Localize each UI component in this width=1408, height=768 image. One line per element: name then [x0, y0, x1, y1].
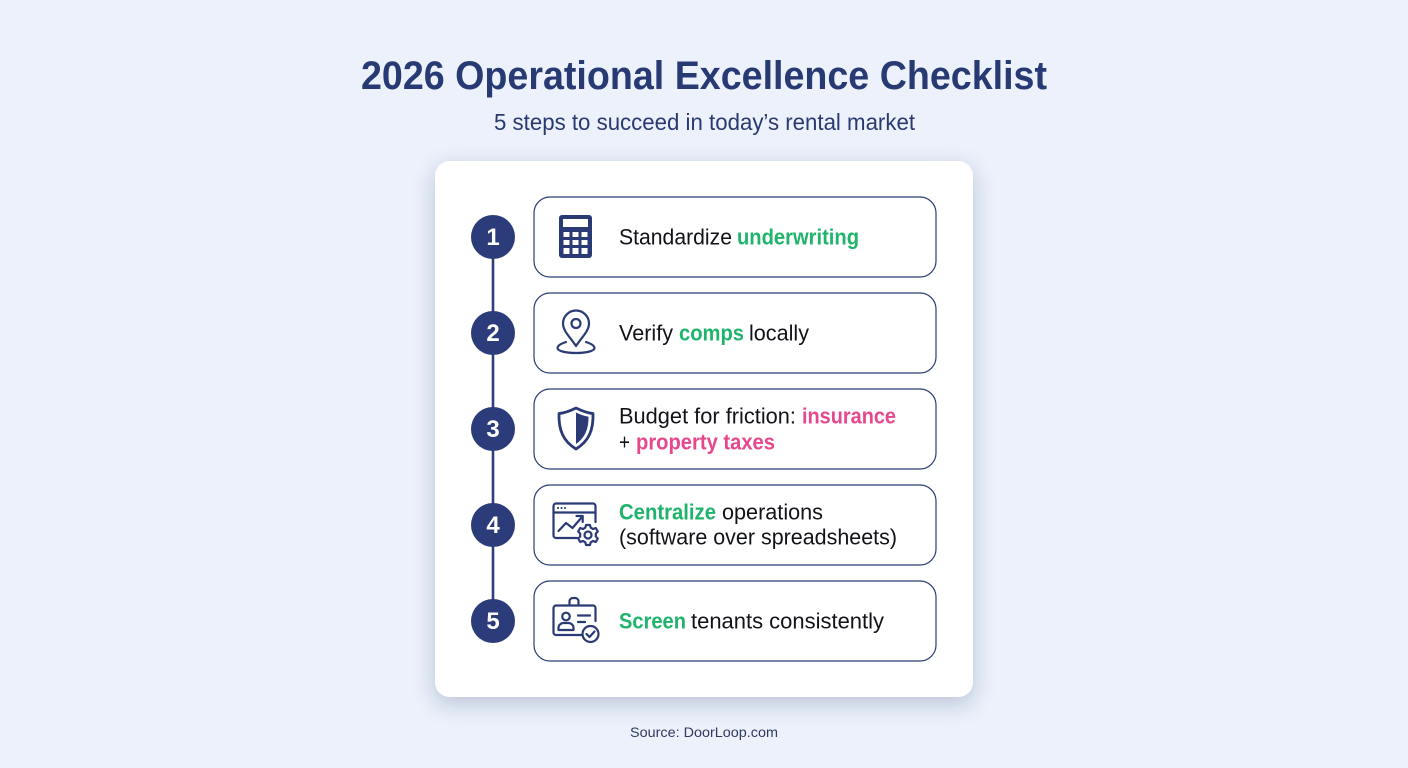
icon: calculator — [559, 215, 592, 258]
step 4 — [471, 485, 936, 565]
step 3: property taxes — [636, 430, 775, 454]
number badge 1: 1 — [486, 224, 500, 251]
number badge 5 — [471, 599, 515, 643]
text 1: underwriting — [737, 224, 859, 250]
source note: Source: DoorLoop.com — [630, 724, 778, 740]
text 3: Budget for friction: — [619, 404, 796, 428]
step 1 — [471, 197, 936, 277]
icon: ID badge with check — [554, 598, 598, 642]
card 3 — [534, 389, 936, 469]
icon: shield — [559, 408, 593, 449]
card 1 — [534, 197, 936, 277]
number badge 5: 5 — [486, 608, 500, 635]
card 5 — [534, 581, 936, 661]
step 3 — [471, 389, 936, 469]
text 5: Screen — [619, 608, 686, 634]
number badge 4: 4 — [486, 512, 500, 539]
step 5 — [471, 581, 936, 661]
number badge 2 — [471, 311, 515, 355]
text 1: Standardize — [619, 224, 732, 250]
text 4: operations — [722, 500, 823, 524]
text 2: locally — [749, 320, 809, 346]
title: 2026 Operational Excellence Checklist — [361, 54, 1047, 98]
number badge 2: 2 — [486, 320, 500, 347]
number badge 1 — [471, 215, 515, 259]
card 4 — [534, 485, 936, 565]
number badge 3: 3 — [486, 416, 500, 443]
timeline connector — [492, 237, 494, 621]
panel: checklist — [435, 161, 973, 697]
step 2 — [471, 293, 936, 373]
subtitle: 5 steps to succeed in today’s rental market — [494, 109, 916, 135]
number badge 4 — [471, 503, 515, 547]
text 3: insurance — [802, 404, 896, 428]
step 3: + — [619, 430, 630, 454]
text 4: Centralize — [619, 500, 716, 524]
card 2 — [534, 293, 936, 373]
text 2: Verify — [619, 320, 673, 346]
icon: map pin — [558, 311, 594, 353]
text 2: comps — [679, 320, 744, 346]
text 5: tenants consistently — [691, 608, 884, 634]
icon: browser chart with gear — [554, 504, 598, 545]
number badge 3 — [471, 407, 515, 451]
step 4: (software over spreadsheets) — [619, 524, 897, 550]
